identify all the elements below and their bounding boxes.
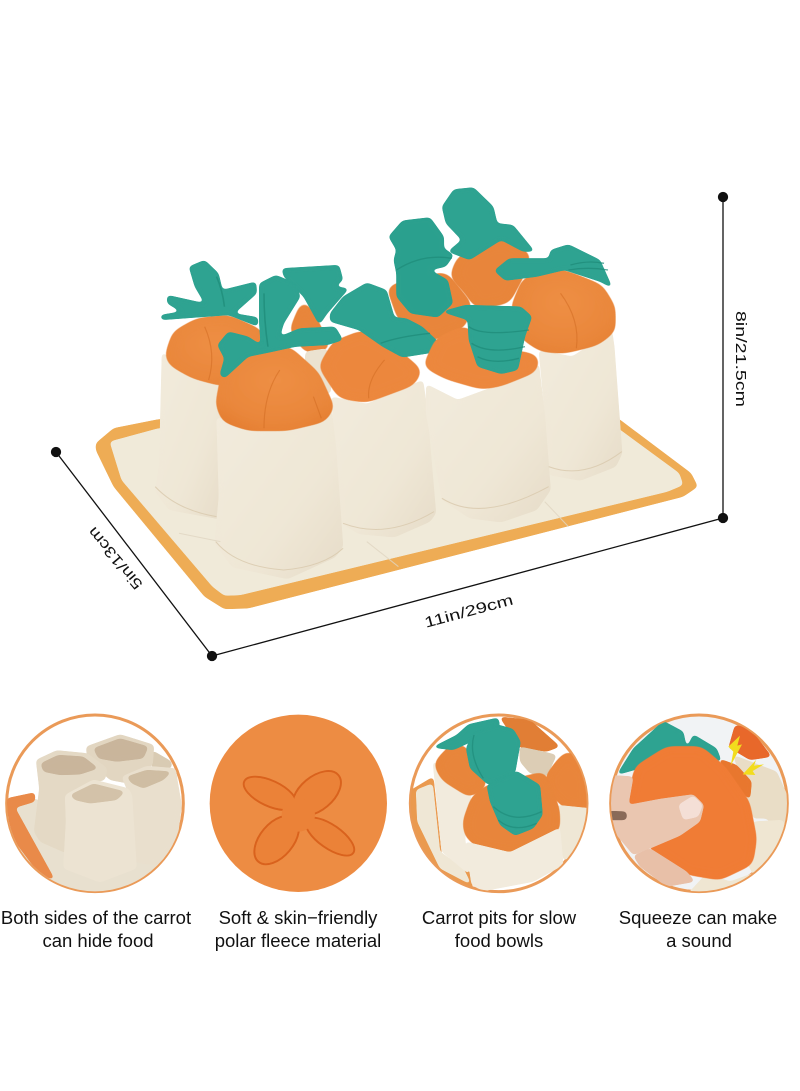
carrot: rear right — [494, 244, 622, 481]
label: height: 8in/21.5cm — [732, 311, 749, 407]
caption 3: food bowls — [455, 930, 543, 951]
caption 1: can hide food — [42, 930, 154, 951]
carrot: middle rear — [387, 217, 472, 342]
product photo — [96, 187, 698, 609]
carrot: rear left — [155, 260, 266, 520]
carrot: rear right head — [442, 187, 535, 308]
caption 2: polar fleece material — [215, 930, 381, 951]
dimension lines — [52, 192, 728, 660]
fabric seams and stitching — [155, 452, 622, 570]
carrot: centre — [319, 283, 440, 537]
mat — [96, 418, 698, 609]
carrot: front right — [423, 305, 551, 522]
detail circle: empty cups — [7, 715, 190, 905]
label: depth: 5in/13cm — [85, 523, 146, 592]
caption 1: Both sides of the carrot — [1, 907, 191, 928]
label: width: 11in/29cm — [423, 592, 515, 632]
detail circle: carrot pits — [408, 715, 590, 892]
carrot: front left — [215, 275, 343, 579]
caption 4: a sound — [666, 930, 732, 951]
carrot: rear centre — [282, 265, 349, 393]
caption 3: Carrot pits for slow — [422, 907, 577, 928]
caption 4: Squeeze can make — [619, 907, 777, 928]
caption 2: Soft & skin−friendly — [219, 907, 378, 928]
icon: sound bolts — [728, 736, 764, 775]
detail circle: fleece with X mark — [210, 715, 387, 892]
detail circle: squeeze with sound — [608, 715, 792, 898]
product infographic — [2, 188, 789, 951]
